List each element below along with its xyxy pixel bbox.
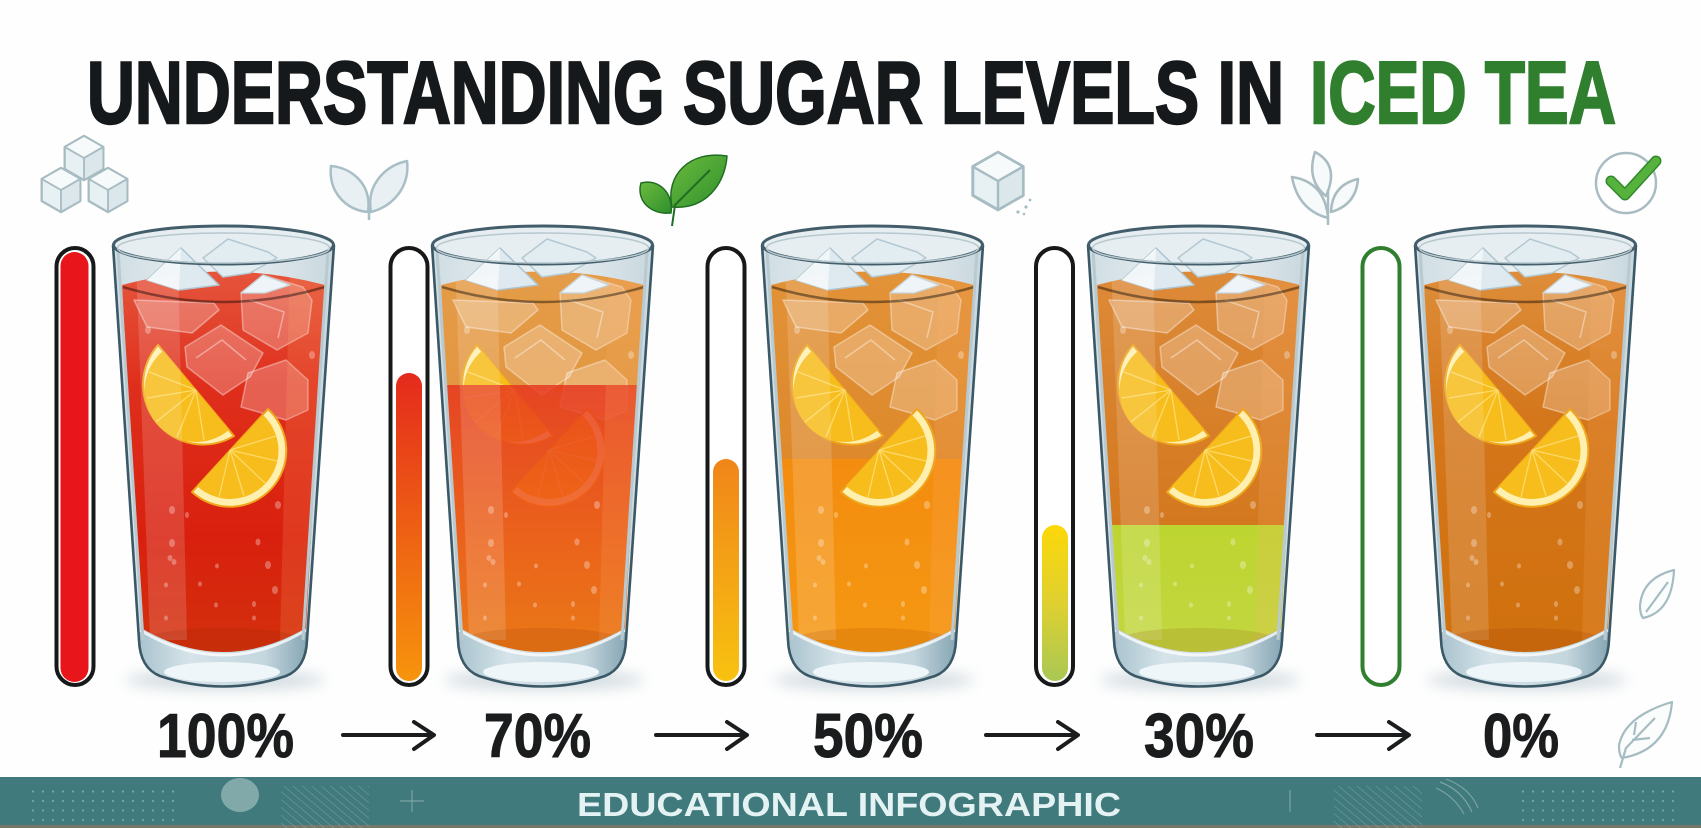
arrow — [1317, 722, 1409, 749]
arrow — [656, 722, 747, 749]
icon: single sugar cube — [973, 152, 1031, 215]
footer text: EDUCATIONAL INFOGRAPHIC — [577, 786, 1121, 823]
icon: outline leaf right — [1640, 570, 1674, 618]
icon: green leaves — [640, 155, 727, 226]
sugar meter 100% — [56, 248, 94, 685]
icon: outline leaf lower right — [1619, 702, 1672, 768]
arrow — [343, 722, 434, 749]
glass 0% — [1415, 226, 1636, 690]
footer banner — [0, 777, 1701, 828]
glass 100% — [113, 226, 334, 690]
label 0%: 0% — [1483, 702, 1559, 771]
sugar meter 70% — [390, 248, 428, 685]
glass 70% — [429, 226, 659, 690]
icon: sugar cubes — [42, 136, 127, 212]
glass 50% — [759, 226, 989, 690]
sugar meter 50% — [708, 248, 744, 685]
icon: pale leaves — [331, 161, 407, 220]
sugar meter 30% — [1036, 248, 1073, 685]
icon: green check in circle — [1596, 153, 1656, 213]
label 50%: 50% — [813, 702, 923, 771]
icon: leaf sprig outline — [1292, 152, 1358, 225]
label 30%: 30% — [1144, 702, 1254, 771]
label 100%: 100% — [157, 702, 294, 771]
title: UNDERSTANDING SUGAR LEVELS IN — [87, 43, 1284, 142]
arrow — [986, 722, 1078, 749]
label 70%: 70% — [484, 702, 591, 771]
glass 30% — [1085, 226, 1315, 690]
sugar meter 0% — [1362, 248, 1400, 685]
